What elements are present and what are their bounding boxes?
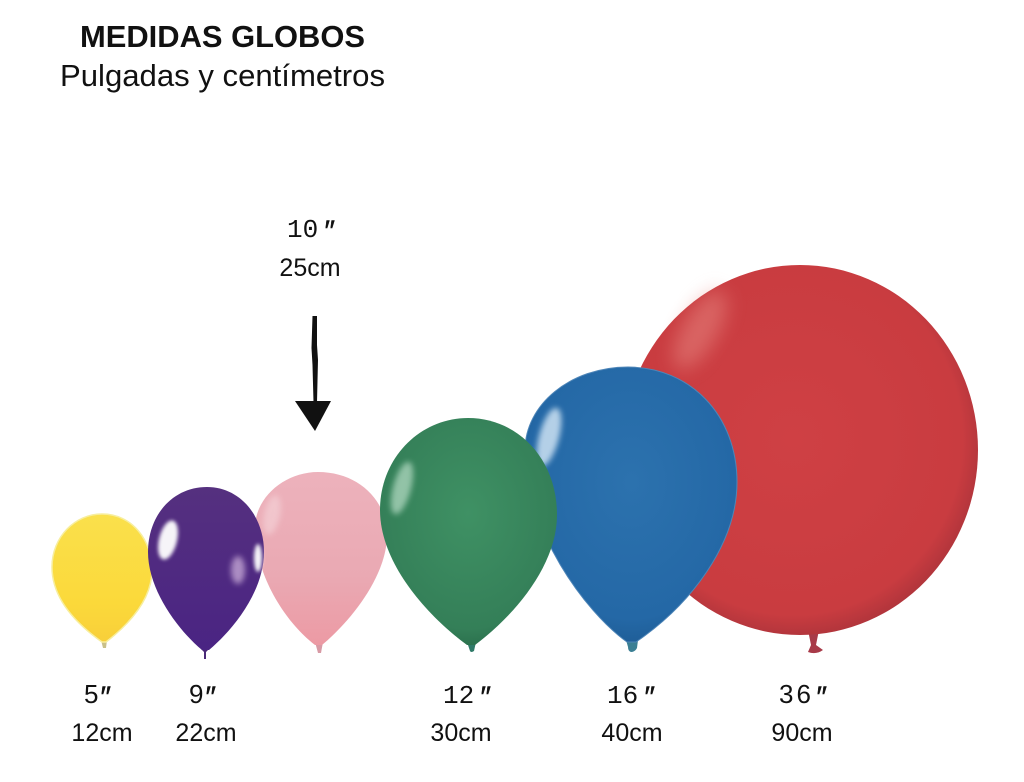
label: 10 inch: ″ — [323, 215, 335, 248]
label: 16 inch: ″ — [643, 681, 655, 714]
label: 5 inch: 12cm — [71, 719, 133, 747]
label: 9 inch: 22cm — [175, 719, 237, 747]
label: 9 inch: ″ — [204, 681, 216, 714]
label: 36 inch: 36 — [779, 679, 814, 709]
label: 12 inch: 30cm — [430, 719, 492, 747]
label: 12 inch: ″ — [479, 681, 491, 714]
balloon: purple 9 inch — [148, 487, 264, 659]
label: 10 inch: 25cm — [279, 254, 341, 282]
label: 12 inch — [430, 681, 492, 747]
balloon: blue 16 inch — [525, 367, 737, 652]
label: 5 inch: ″ — [99, 681, 111, 714]
label: 36 inch — [771, 679, 833, 747]
label: 9 inch: 9 — [189, 679, 203, 709]
label: 5 inch: 5 — [84, 679, 98, 709]
label: 10 inch: 10 — [287, 215, 318, 245]
balloon: green 12 inch — [380, 418, 557, 652]
arrow: points to the 10 inch balloon — [295, 316, 331, 431]
label: 16 inch — [601, 681, 663, 747]
label: 5 inch — [71, 679, 133, 747]
label: 36 inch: 90cm — [771, 719, 833, 747]
balloon: yellow 5 inch — [52, 514, 152, 648]
subtitle: Pulgadas y centímetros — [60, 58, 385, 93]
label: 36 inch: ″ — [815, 681, 827, 714]
label: 16 inch: 40cm — [601, 719, 663, 747]
label: 9 inch — [175, 679, 237, 747]
label: 16 inch: 16 — [607, 681, 638, 711]
balloon: red 36 inch — [622, 265, 978, 653]
balloon: pink 10 inch — [255, 472, 387, 653]
label: 12 inch: 12 — [443, 681, 474, 711]
label: 10 inch — [279, 215, 341, 282]
title: MEDIDAS GLOBOS — [80, 19, 365, 54]
